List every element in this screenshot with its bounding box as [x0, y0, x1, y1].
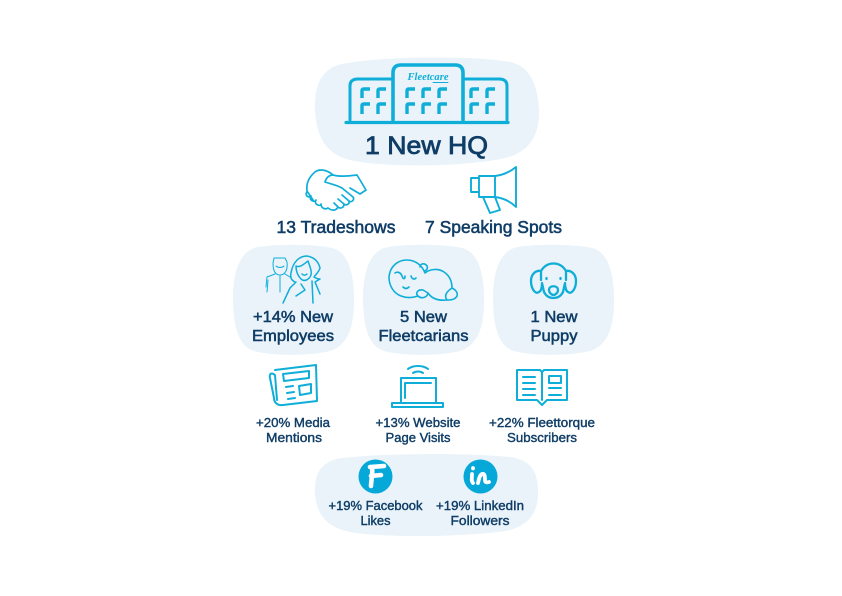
- icon: handshake: [306, 170, 366, 210]
- label: Fleetcarians: [378, 328, 469, 345]
- label: Mentions: [266, 430, 323, 445]
- label: Subscribers: [507, 430, 578, 445]
- label: 13 Tradeshows: [276, 217, 396, 237]
- label: Page Visits: [386, 430, 451, 445]
- stat: website visits: [376, 366, 460, 445]
- icon: LinkedIn: [464, 460, 498, 494]
- label: 1 New: [530, 309, 578, 326]
- stat: Facebook likes: [328, 460, 423, 528]
- label: +19% LinkedIn: [436, 498, 524, 513]
- icon: Fleetcare building: [346, 65, 508, 122]
- stat: tradeshows: [276, 170, 396, 237]
- panel: new puppy: [493, 245, 614, 355]
- stat: Fleettorque subscribers: [489, 370, 595, 445]
- icon: puppy: [531, 264, 576, 298]
- panel: new employees: [233, 245, 354, 355]
- icon: megaphone: [471, 167, 516, 213]
- label: +22% Fleettorque: [489, 415, 595, 430]
- heading: 1 New HQ: 1 New HQ: [365, 132, 488, 160]
- label: 5 New: [400, 309, 448, 326]
- label: 7 Speaking Spots: [425, 217, 562, 237]
- icon: laptop with wifi: [392, 366, 443, 407]
- panel: new HQ: [315, 57, 539, 165]
- stat: media mentions: [256, 365, 331, 445]
- panel: social media: [315, 454, 538, 536]
- label: Likes: [360, 513, 391, 528]
- stat: LinkedIn followers: [436, 460, 524, 528]
- icon: two employees: [266, 256, 320, 303]
- label: Followers: [450, 513, 510, 528]
- logo text: Fleetcare: [407, 71, 449, 83]
- icon: newspaper: [270, 365, 317, 405]
- label: +13% Website: [376, 415, 460, 430]
- icon: open book: [517, 370, 567, 405]
- panel: new Fleetcarians: [363, 245, 484, 355]
- icon: Facebook: [358, 460, 392, 494]
- label: +19% Facebook: [328, 498, 423, 513]
- label: +20% Media: [256, 415, 331, 430]
- label: Puppy: [530, 328, 578, 345]
- label: Employees: [252, 328, 334, 345]
- stat: speaking spots: [425, 167, 562, 237]
- label: +14% New: [253, 309, 334, 326]
- icon: sleeping baby: [389, 260, 457, 300]
